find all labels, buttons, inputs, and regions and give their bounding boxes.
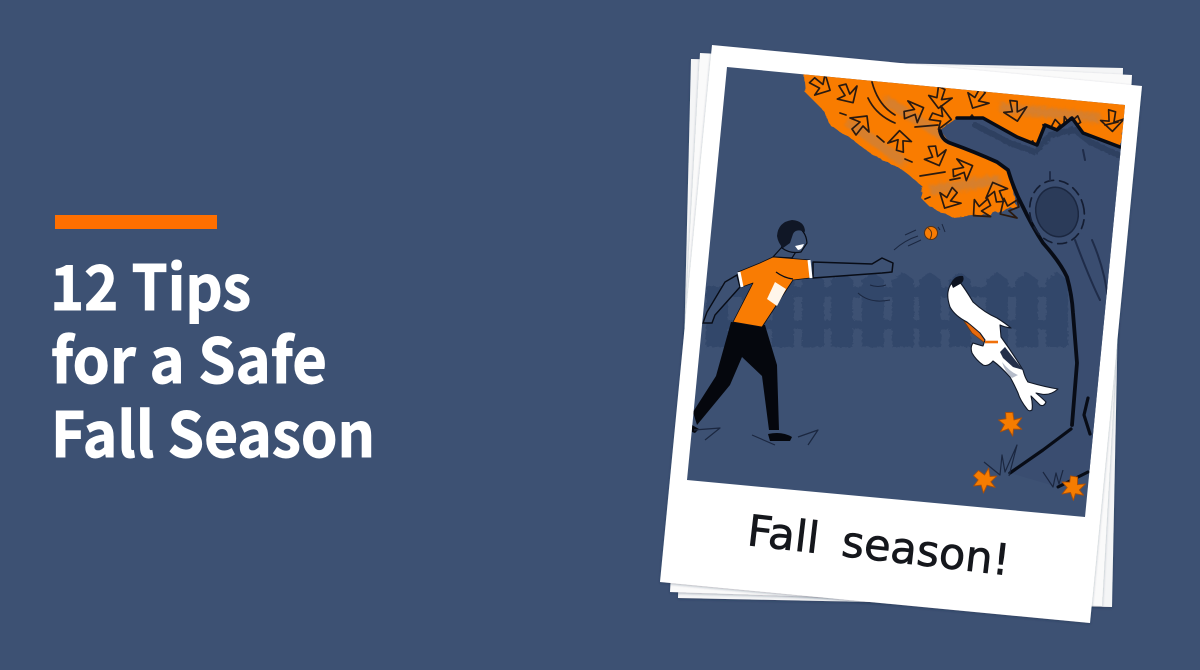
- tree canopy: [803, 70, 1130, 218]
- title: [50, 238, 375, 475]
- back photo: [678, 59, 1123, 607]
- handwritten caption: [745, 506, 1013, 586]
- legs: [693, 322, 779, 430]
- orange accent bar: [55, 215, 217, 229]
- title: for a Safe: [51, 311, 327, 401]
- smile: [795, 244, 804, 250]
- hair: [777, 220, 805, 248]
- grass tufts: [694, 428, 1063, 487]
- fence: [706, 272, 1068, 347]
- neck and head: [773, 247, 797, 258]
- handwritten caption: season!: [839, 517, 1013, 586]
- shirt pocket: [767, 282, 786, 306]
- fallen leaves: [973, 412, 1086, 501]
- dark patch: [1000, 347, 1023, 370]
- tree knot: [1035, 186, 1079, 238]
- ball: [858, 224, 945, 301]
- title: 12 Tips: [50, 238, 251, 328]
- photo stack: [660, 45, 1142, 623]
- front arm: [813, 258, 893, 278]
- shoes: [692, 425, 792, 441]
- canopy leaves: [808, 74, 1125, 220]
- body: [948, 281, 1058, 411]
- person: [692, 220, 893, 441]
- dog: [948, 276, 1058, 411]
- nose: [951, 276, 964, 288]
- orange shirt: [733, 257, 810, 327]
- scarf: [964, 321, 985, 343]
- back arm: [703, 275, 740, 323]
- middle photo: [670, 53, 1132, 606]
- tree trunk: [940, 118, 1125, 487]
- title: Fall Season: [51, 385, 375, 475]
- front photo: [660, 45, 1142, 623]
- illustration: [680, 60, 1130, 520]
- handwritten caption: Fall: [745, 506, 822, 564]
- collar: [985, 341, 998, 343]
- canopy shading: [848, 100, 1100, 190]
